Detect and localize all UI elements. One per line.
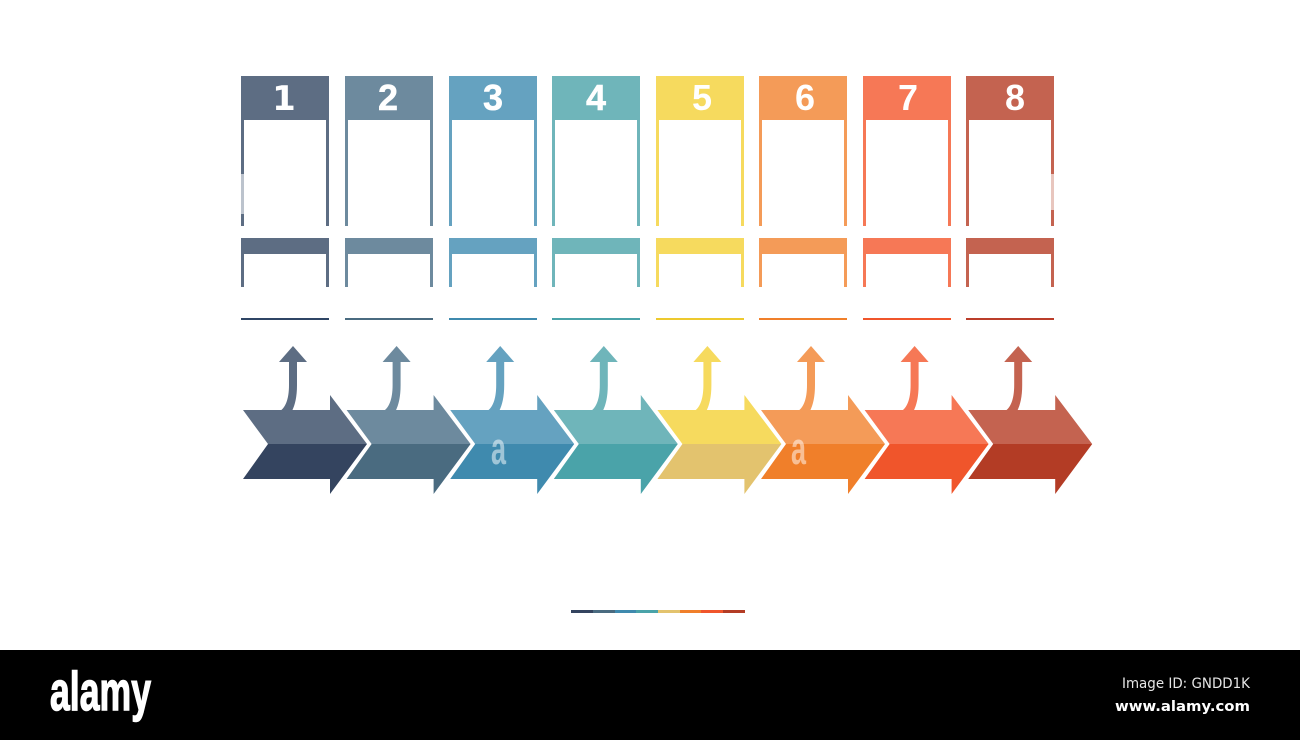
footer band xyxy=(0,650,1300,740)
card 3: 3 xyxy=(483,77,503,118)
arrow 4 xyxy=(554,346,678,494)
card 4 xyxy=(552,76,640,226)
image id: Image ID: GNDD1K xyxy=(1122,676,1251,692)
bracket 4 xyxy=(552,238,640,287)
arrow 5 xyxy=(657,346,781,494)
arrow 3 xyxy=(450,346,574,494)
card 1 xyxy=(241,76,329,226)
bracket 3 xyxy=(449,238,537,287)
watermark letter on arrow 3: a xyxy=(491,423,507,474)
card 1: 1 xyxy=(272,79,296,119)
card 2: 2 xyxy=(378,77,398,118)
card 4: 4 xyxy=(586,77,606,118)
card 7 xyxy=(863,76,951,226)
thin line row xyxy=(241,318,1054,320)
arrow 6 xyxy=(761,346,885,494)
card 8: 8 xyxy=(1005,77,1025,118)
bracket 1 xyxy=(241,238,329,287)
footer logo: alamy xyxy=(50,660,151,722)
bracket 6 xyxy=(759,238,847,287)
bottom colour bar xyxy=(571,610,745,613)
card 2 xyxy=(345,76,433,226)
small bracket row xyxy=(241,238,1054,287)
card 7: 7 xyxy=(898,77,918,118)
watermark letter on arrow 6: a xyxy=(791,423,807,474)
arrow chain xyxy=(243,346,1092,494)
bracket 8 xyxy=(966,238,1054,287)
step cards row xyxy=(241,76,1054,226)
arrow 2 xyxy=(347,346,471,494)
card 6 xyxy=(759,76,847,226)
bracket 2 xyxy=(345,238,433,287)
card 8 xyxy=(966,76,1054,226)
bracket 5 xyxy=(656,238,744,287)
card 6: 6 xyxy=(795,77,815,118)
website: www.alamy.com xyxy=(1115,699,1250,715)
arrow 1 xyxy=(243,346,367,494)
card 5 xyxy=(656,76,744,226)
arrow 7 xyxy=(865,346,989,494)
arrow 8 xyxy=(968,346,1092,494)
card 5: 5 xyxy=(692,77,712,118)
bracket 7 xyxy=(863,238,951,287)
card 3 xyxy=(449,76,537,226)
